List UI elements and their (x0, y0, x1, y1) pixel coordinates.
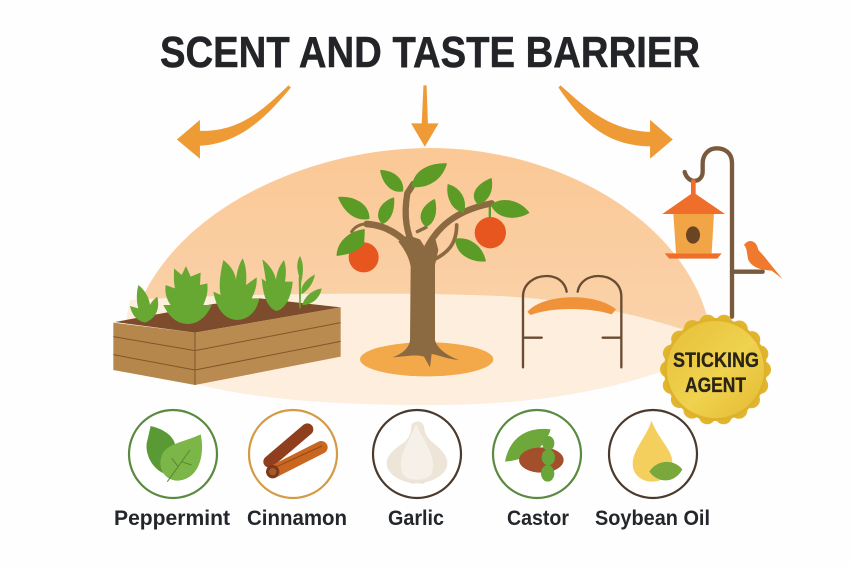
raised garden bed with plants (113, 256, 341, 385)
ingredient: castor: Castor (507, 507, 569, 530)
birdhouse (662, 179, 725, 259)
bird feeder pole with birdhouse and bird (662, 148, 783, 317)
leaf over left apple (337, 230, 364, 255)
background: peach dome (143, 148, 707, 350)
arrow: right (558, 85, 673, 159)
apple: right (475, 207, 506, 248)
bed right face (195, 307, 341, 385)
pole and hook (685, 148, 732, 317)
arrow: centre (411, 85, 439, 147)
ingredient: cinnamon: Cinnamon (247, 507, 347, 530)
arrows: from title to garden (177, 85, 673, 159)
leaves (339, 164, 528, 261)
ingredient: peppermint (114, 410, 230, 530)
background: cream ground (120, 294, 700, 405)
bed left face (113, 323, 195, 385)
plants (130, 256, 322, 324)
bird (744, 241, 783, 279)
badge: sticking agent: STICKING (673, 349, 759, 372)
ingredient: peppermint: Peppermint (114, 507, 230, 530)
orange band (527, 297, 616, 315)
apple tree (337, 164, 528, 376)
ingredient: garlic (373, 410, 461, 530)
badge: sticking agent: AGENT (685, 374, 746, 397)
trunk and roots (393, 235, 459, 367)
ingredient: castor (493, 410, 581, 530)
title: SCENT AND TASTE BARRIER (160, 28, 700, 77)
ingredient: cinnamon (247, 410, 347, 530)
branches (352, 184, 492, 260)
ingredient: soybean oil: Soybean Oil (595, 507, 710, 530)
apple: left (349, 242, 379, 272)
ingredient: soybean oil (595, 410, 710, 530)
badge: sticking agent (664, 318, 767, 421)
garden hoop with orange band (523, 276, 621, 367)
arrow: left (177, 85, 291, 159)
ingredient: garlic: Garlic (388, 507, 444, 530)
ground patch (360, 342, 493, 376)
perch (732, 265, 763, 278)
soil (115, 298, 341, 333)
